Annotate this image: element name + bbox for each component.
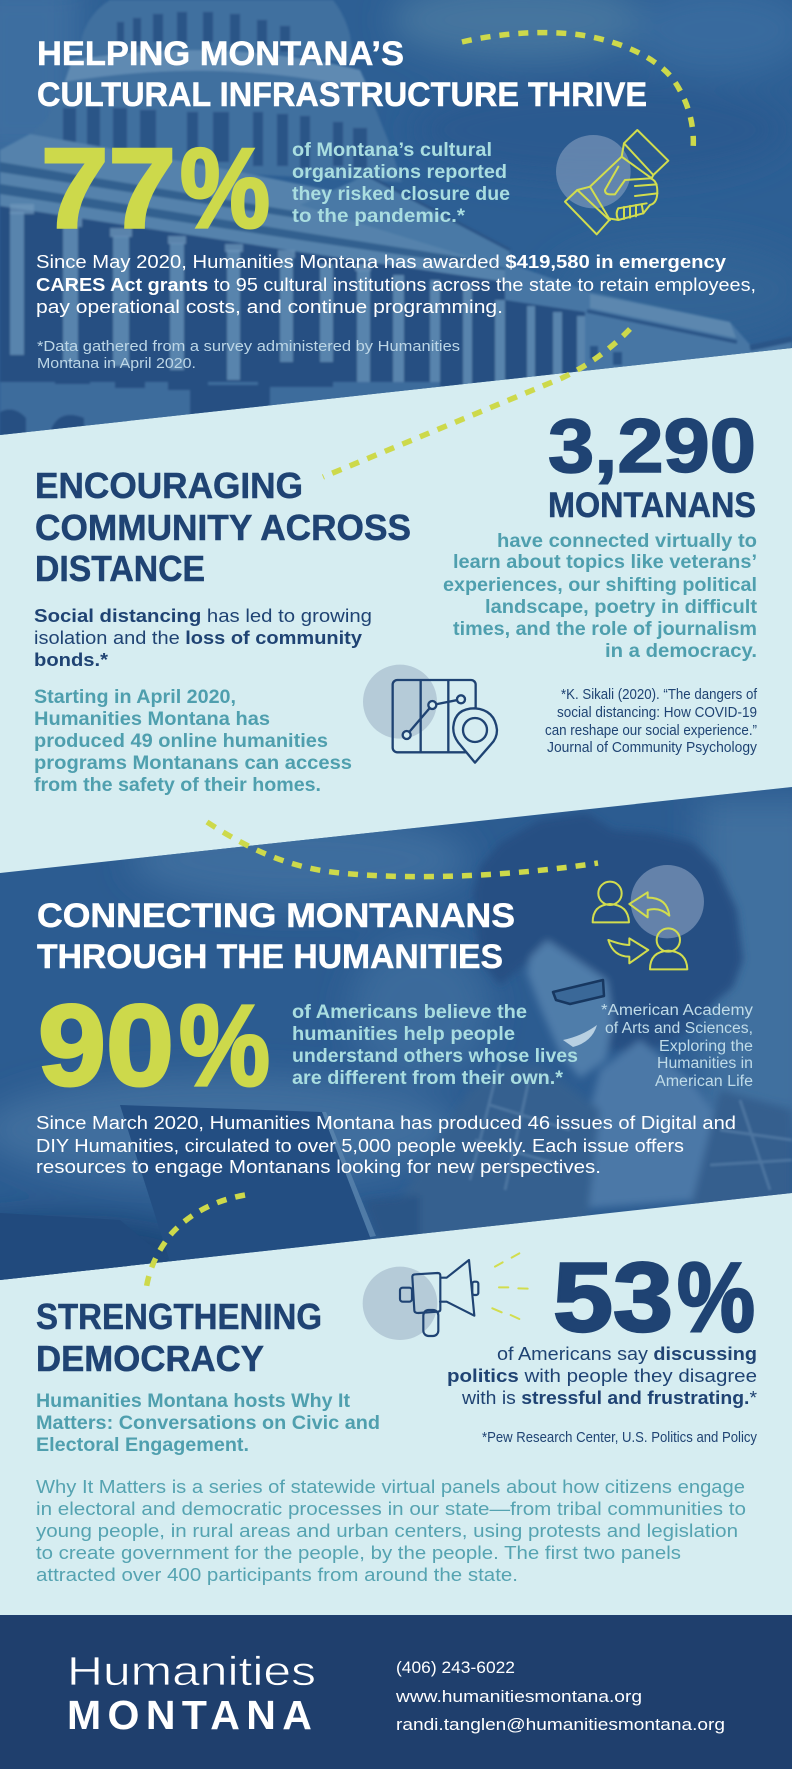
big stat 90%	[38, 982, 270, 1110]
why it matters intro: Electoral Engagement.	[36, 1435, 249, 1456]
heading	[35, 465, 411, 589]
panel: encouraging community	[34, 404, 758, 796]
program text: produced 49 online humanities	[34, 731, 328, 752]
program text: programs Montanans can access	[34, 753, 352, 774]
dashed connector: middle arc	[207, 822, 598, 877]
why it matters intro: Matters: Conversations on Civic and	[36, 1413, 380, 1434]
body paragraph	[36, 251, 756, 317]
citation: Exploring the	[659, 1038, 753, 1055]
body paragraph	[36, 1476, 746, 1585]
logo: Humanities Montana	[67, 1648, 318, 1738]
stat description: of Americans believe the	[292, 1001, 527, 1023]
program text: Humanities Montana has	[34, 709, 270, 730]
citation: social distancing: How COVID-19	[557, 704, 757, 721]
stat description	[292, 139, 510, 227]
capitol building photo	[0, 0, 792, 442]
heading: DISTANCE	[35, 548, 205, 589]
big stat 53%: %	[677, 1242, 755, 1352]
footnote	[37, 338, 460, 372]
citation: American Life	[655, 1073, 753, 1090]
social distancing text	[34, 605, 372, 670]
heading: CONNECTING MONTANANS	[37, 897, 515, 935]
big stat 77%: %	[180, 125, 270, 251]
why it matters intro	[36, 1391, 380, 1456]
heading	[36, 1296, 322, 1379]
logo: Humanities Montana: MONTANA	[67, 1692, 318, 1738]
program text	[34, 687, 352, 796]
stat description	[292, 1001, 578, 1089]
stat description: politics with people they disagree	[447, 1365, 757, 1386]
body paragraph: attracted over 400 participants from around the state.	[36, 1564, 518, 1585]
stat description: experiences, our shifting political	[443, 574, 757, 596]
icon: megaphone	[363, 1253, 528, 1340]
heading: COMMUNITY ACROSS	[35, 507, 411, 548]
icon: handshake	[556, 130, 668, 234]
heading: HELPING MONTANA’S	[37, 35, 404, 73]
stat description	[447, 1343, 757, 1408]
citation	[601, 1002, 753, 1090]
social distancing text: isolation and the loss of community	[34, 627, 363, 648]
body paragraph: Since May 2020, Humanities Montana has awarded $419,580 in emergency	[36, 251, 727, 272]
icon: map with pin	[363, 665, 497, 763]
big stat 77%: 77	[41, 125, 176, 251]
big stat 53%	[553, 1242, 755, 1352]
program text: Starting in April 2020,	[34, 687, 236, 708]
body paragraph	[36, 1112, 736, 1177]
citation	[545, 686, 758, 756]
panel: strengthening democracy	[36, 1242, 757, 1585]
photo of woman with laptop	[0, 780, 792, 1290]
big stat 90%: %	[179, 982, 270, 1110]
citation: of Arts and Sciences,	[605, 1020, 753, 1037]
heading: ENCOURAGING	[35, 465, 303, 506]
heading	[37, 35, 647, 114]
stat description: humanities help people	[292, 1023, 515, 1045]
stat description	[443, 530, 758, 662]
stat description: understand others whose lives	[292, 1045, 578, 1067]
footer	[0, 1615, 792, 1769]
big stat 90%: 90	[38, 982, 174, 1110]
stat description: landscape, poetry in difficult	[485, 596, 758, 618]
dashed connector: top arc	[462, 33, 693, 150]
heading: STRENGTHENING	[36, 1296, 322, 1337]
program text: from the safety of their homes.	[34, 775, 321, 796]
contact details: www.humanitiesmontana.org	[395, 1687, 642, 1706]
footnote: *Data gathered from a survey administered by Humanities	[37, 338, 460, 355]
citation: *Pew Research Center, U.S. Politics and Policy	[482, 1429, 757, 1446]
big stat 3,290: 3,290	[548, 404, 756, 489]
panel: cultural infrastructure	[0, 0, 792, 442]
body paragraph: in electoral and democratic processes in our state—from tribal communities to	[36, 1498, 746, 1519]
stat description: in a democracy.	[605, 640, 757, 662]
heading: THROUGH THE HUMANITIES	[37, 938, 503, 976]
stat description: have connected virtually to	[497, 530, 757, 552]
citation: *American Academy	[601, 1002, 753, 1019]
social distancing text: bonds.*	[34, 649, 109, 670]
heading	[37, 897, 515, 976]
citation: can reshape our social experience.”	[545, 722, 757, 739]
contact details	[395, 1658, 725, 1734]
body paragraph: DIY Humanities, circulated to over 5,000 people weekly. Each issue offers	[36, 1135, 684, 1156]
dashed connector: lower arc	[146, 1195, 245, 1290]
dashed connector: diagonal	[323, 329, 630, 477]
body paragraph: pay operational costs, and continue programming.	[36, 296, 503, 317]
body paragraph: to create government for the people, by the people. The first two panels	[36, 1542, 681, 1563]
heading: CULTURAL INFRASTRUCTURE THRIVE	[37, 76, 647, 114]
footnote: Montana in April 2020.	[37, 355, 196, 372]
citation: Humanities in	[657, 1055, 753, 1072]
stat description: times, and the role of journalism	[453, 618, 757, 640]
why it matters intro: Humanities Montana hosts Why It	[36, 1391, 351, 1412]
social distancing text: Social distancing has led to growing	[34, 605, 372, 626]
body paragraph: Since March 2020, Humanities Montana has produced 46 issues of Digital and	[36, 1112, 736, 1133]
big stat 77%	[41, 125, 270, 251]
big stat 53%: 53	[553, 1242, 673, 1352]
body paragraph: CARES Act grants to 95 cultural institutions across the state to retain employees,	[36, 274, 756, 295]
heading: DEMOCRACY	[36, 1338, 264, 1379]
stat description: organizations reported	[292, 161, 507, 183]
icon: people exchanging	[593, 865, 704, 969]
stat description: they risked closure due	[292, 183, 510, 205]
citation: *K. Sikali (2020). “The dangers of	[561, 686, 758, 703]
stat description: of Americans say discussing	[497, 1343, 757, 1364]
stat description: of Montana’s cultural	[292, 139, 492, 161]
panel: connecting montanans	[0, 780, 792, 1290]
stat description: to the pandemic.*	[292, 205, 465, 227]
stat description: learn about topics like veterans’	[453, 551, 757, 573]
body paragraph: Why It Matters is a series of statewide virtual panels about how citizens engage	[36, 1476, 745, 1497]
body paragraph: resources to engage Montanans looking for new perspectives.	[36, 1156, 601, 1177]
stat description: are different from their own.*	[292, 1067, 563, 1089]
logo: Humanities Montana: Humanities	[67, 1648, 316, 1694]
stat description: with is stressful and frustrating. *	[461, 1387, 757, 1408]
contact details: (406) 243-6022	[396, 1658, 515, 1677]
stat label: MONTANANS	[548, 486, 756, 525]
contact details: randi.tanglen@humanitiesmontana.org	[396, 1715, 725, 1734]
body paragraph: young people, in rural areas and urban centers, using protests and legislation	[36, 1520, 738, 1541]
citation: Journal of Community Psychology	[547, 739, 757, 756]
